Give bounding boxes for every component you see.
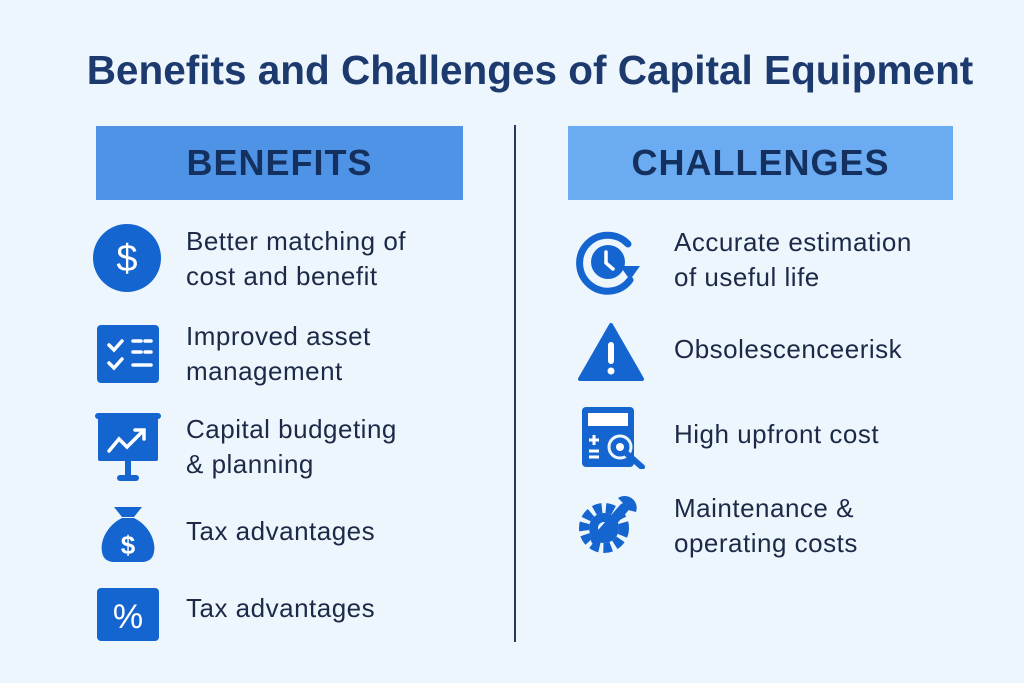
text: useful life bbox=[674, 227, 912, 292]
header: benefits bbox=[96, 126, 463, 200]
icon: calculator bbox=[582, 407, 645, 469]
text: tax advantages 2: Tax advantages bbox=[186, 593, 375, 623]
text: maintenance: Maintenance & bbox=[674, 493, 854, 523]
icon: percent: % bbox=[113, 598, 143, 636]
text: matching: Better matching of bbox=[186, 226, 406, 256]
title: Benefits and Challenges of Capital Equipment bbox=[87, 47, 973, 93]
panel: benefits bbox=[93, 224, 406, 641]
icon: dollar circle: $ bbox=[116, 238, 138, 280]
text: maintenance bbox=[674, 493, 858, 558]
text: useful life: Accurate estimation bbox=[674, 227, 912, 257]
icon: money bag: $ bbox=[121, 530, 136, 560]
text: budgeting: Capital budgeting bbox=[186, 414, 397, 444]
text: useful life: of useful life bbox=[674, 262, 820, 292]
icon: dollar circle bbox=[93, 224, 161, 292]
icon: checklist bbox=[97, 325, 159, 383]
text: asset management bbox=[186, 321, 371, 386]
text: budgeting: & planning bbox=[186, 449, 314, 479]
text: upfront cost: High upfront cost bbox=[674, 419, 879, 449]
text: asset management: Improved asset bbox=[186, 321, 371, 351]
panel: challenges bbox=[576, 227, 912, 558]
text: matching: cost and benefit bbox=[186, 261, 378, 291]
text: maintenance: operating costs bbox=[674, 528, 858, 558]
text: budgeting bbox=[186, 414, 397, 479]
icon: clock cycle bbox=[576, 232, 640, 295]
icon: money bag bbox=[102, 507, 154, 562]
header: benefits: BENEFITS bbox=[186, 142, 372, 183]
header: challenges bbox=[568, 126, 953, 200]
icon: warning bbox=[578, 322, 644, 381]
text: obsolescence: Obsolescenceerisk bbox=[674, 334, 902, 364]
text: asset management: management bbox=[186, 356, 343, 386]
text: tax advantages 1: Tax advantages bbox=[186, 516, 375, 546]
icon: percent bbox=[97, 588, 159, 641]
text: matching bbox=[186, 226, 406, 291]
header: challenges: CHALLENGES bbox=[631, 142, 890, 183]
icon: gear wrench bbox=[579, 496, 637, 553]
icon: presentation chart bbox=[95, 413, 161, 481]
